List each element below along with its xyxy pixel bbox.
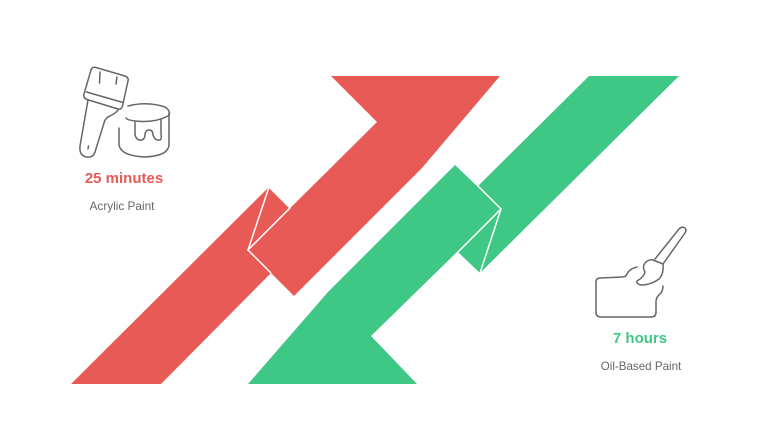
heading: 25 minutes: 25 minutes (85, 170, 163, 187)
label: Oil-Based Paint: Oil-Based Paint (601, 360, 682, 373)
red lower band (71, 187, 290, 384)
red upper arrow (248, 76, 500, 296)
icon: brush on canvas (596, 227, 686, 317)
heading: 7 hours: 7 hours (613, 330, 667, 347)
green arrow: oil-based paint (248, 76, 679, 384)
green upper band (458, 76, 679, 273)
icon: paint brush and can (80, 67, 169, 157)
red arrow: acrylic paint (71, 76, 500, 384)
green lower arrow (248, 165, 501, 384)
label: Acrylic Paint: Acrylic Paint (90, 199, 155, 213)
green fold triangle (458, 209, 501, 273)
red fold triangle (248, 187, 290, 250)
